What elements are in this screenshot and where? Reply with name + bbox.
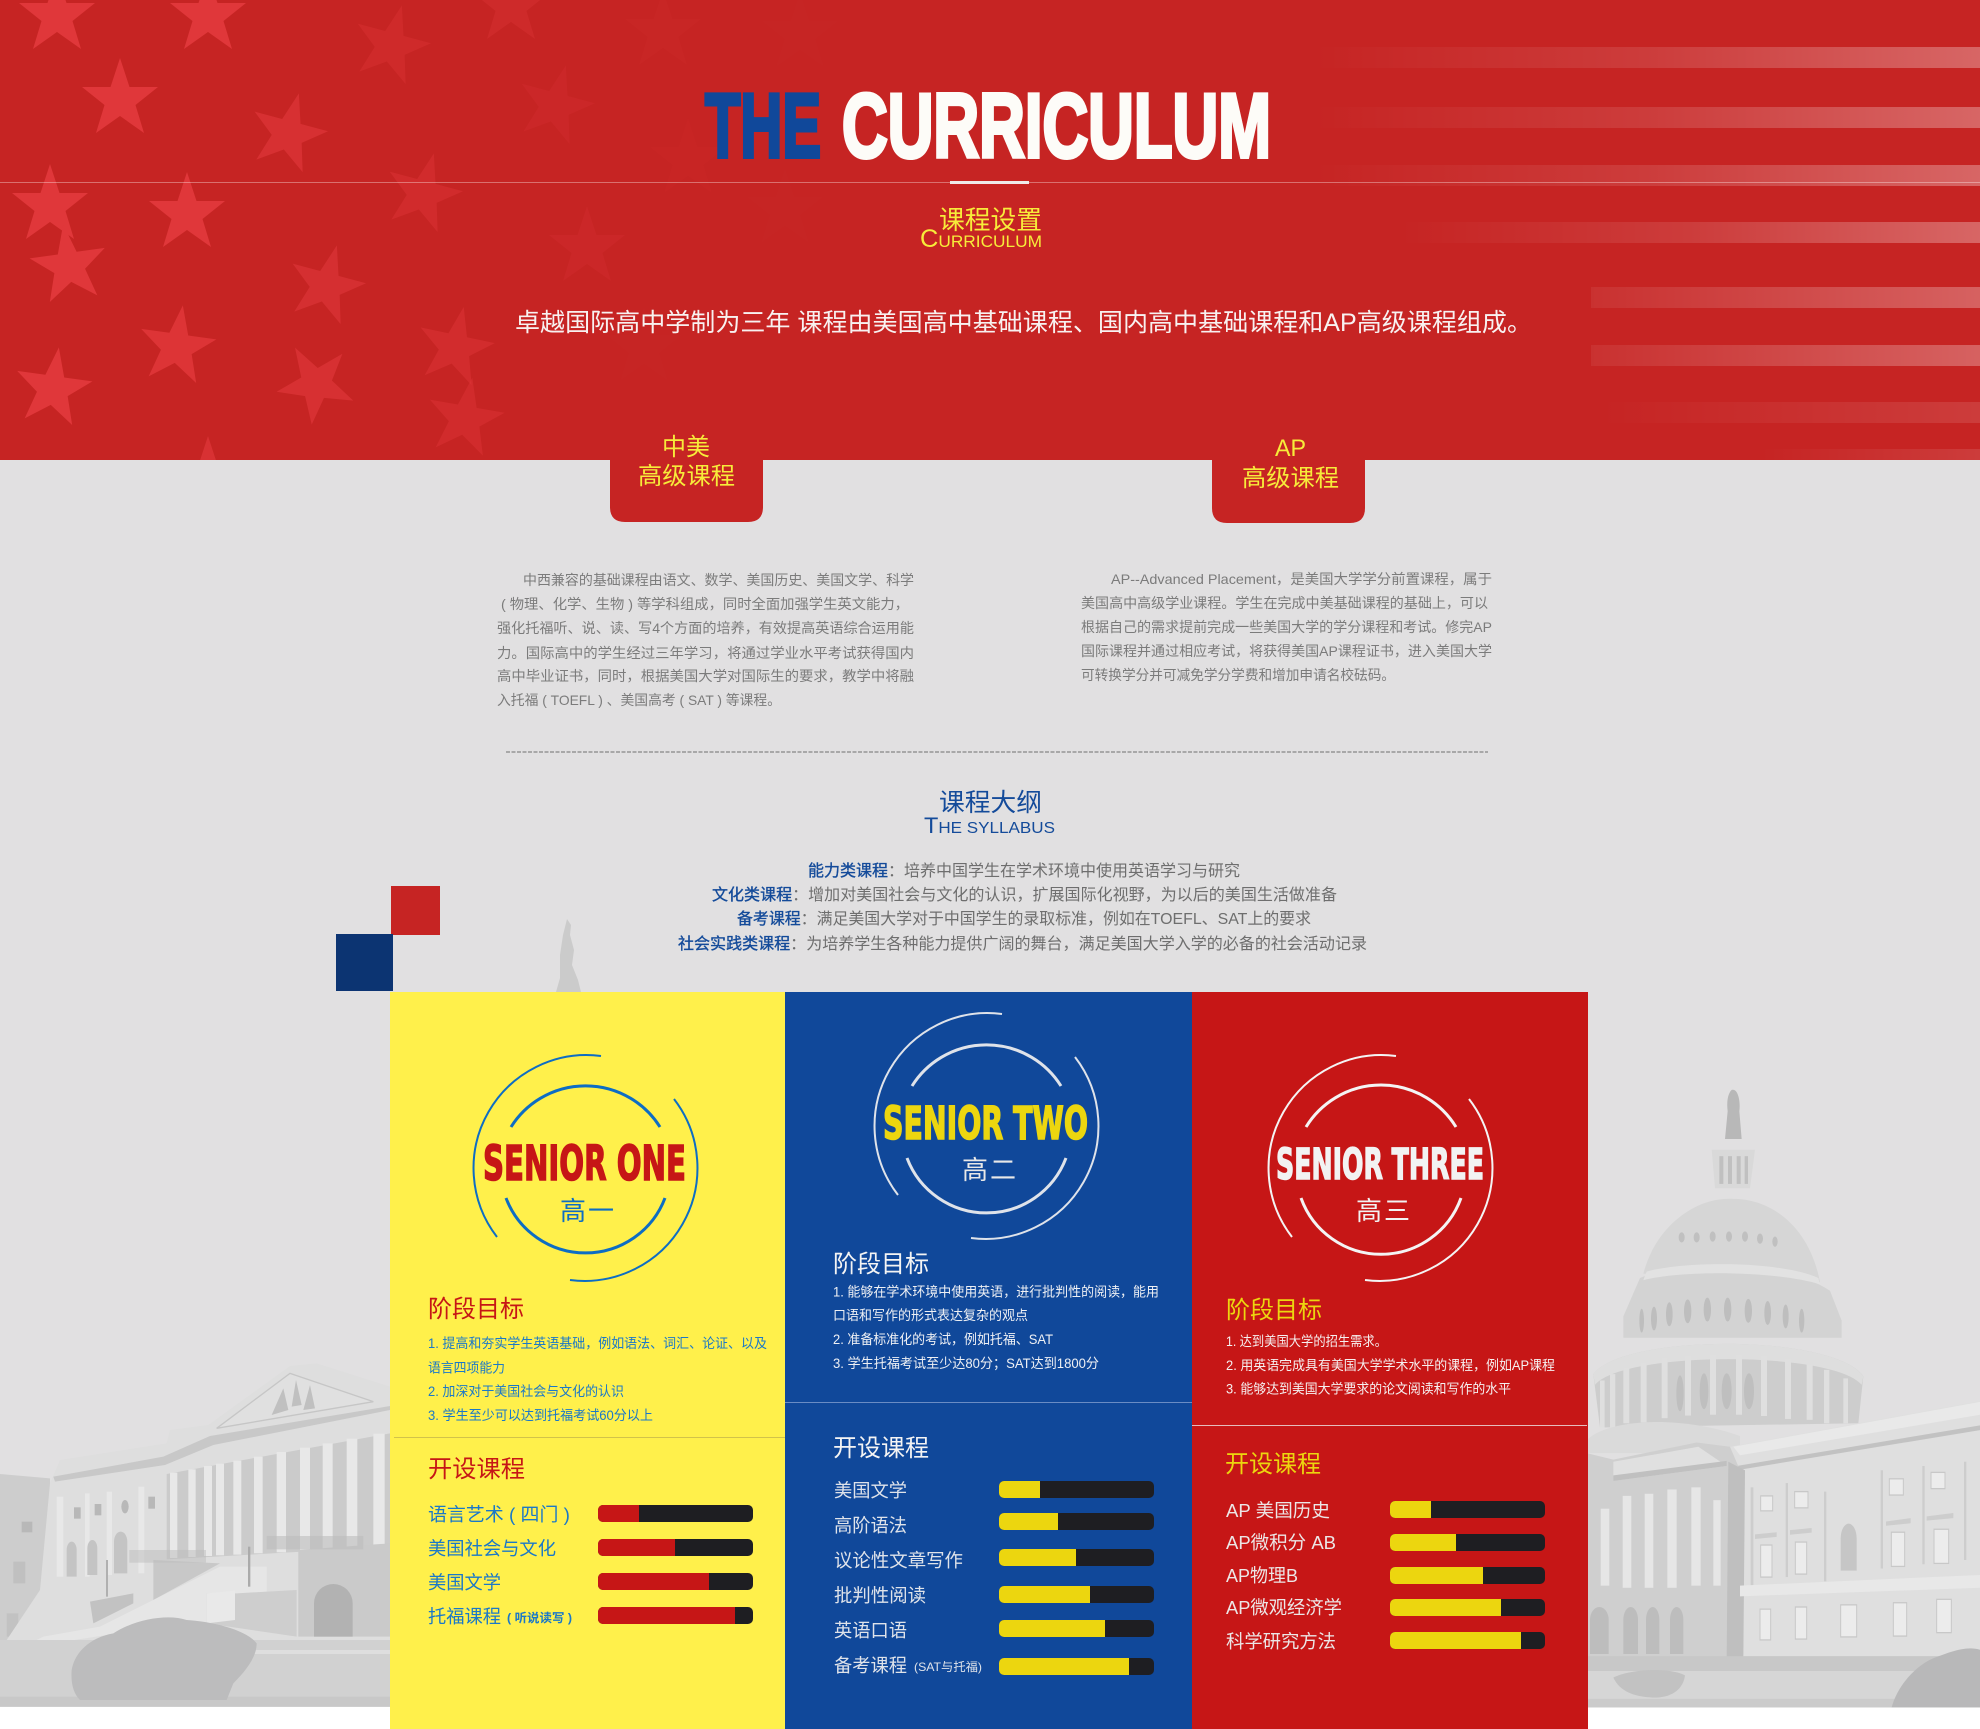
- background stars: [11, 0, 838, 511]
- panel: senior one: [390, 992, 785, 1729]
- text block: AP description: 美国高中高级学业课程。学生在完成中美基础课程的基础上，可以: [1081, 595, 1488, 611]
- text block: AP description: 可转换学分并可减免学分学费和增加申请名校砝码。: [1081, 667, 1395, 683]
- course labels: 语言艺术 ( 四门 ): [428, 1504, 570, 1525]
- badge: senior three: 高三: [1356, 1196, 1410, 1226]
- statue silhouette: [556, 919, 581, 992]
- course labels: AP物理B: [1226, 1565, 1298, 1586]
- text block: sino-american description: [497, 572, 914, 708]
- heading: stage goals: 阶段目标: [428, 1296, 524, 1323]
- course labels: AP 美国历史: [1226, 1500, 1330, 1521]
- tab: sino-american courses: 中美: [662, 434, 710, 461]
- course bars: [598, 1505, 753, 1624]
- title: [705, 76, 1271, 177]
- goals list: 3. 能够达到美国大学要求的论文阅读和写作的水平: [1226, 1382, 1511, 1396]
- badge: senior one: SENIOR ONE: [483, 1136, 686, 1192]
- text block: sino-american description: 入托福 ( TOEFL ) 、美国高考 ( SAT ) 等课程。: [497, 692, 781, 708]
- section heading: syllabus: THE SYLLABUS: [924, 813, 1055, 838]
- goals list: 1. 能够在学术环境中使用英语，进行批判性的阅读，能用: [833, 1284, 1159, 1300]
- panel: senior three: [1192, 992, 1588, 1729]
- course labels: AP微观经济学: [1226, 1597, 1342, 1618]
- badge: senior one: [474, 1055, 697, 1281]
- text block: sino-american description: 高中毕业证书，同时，根据美国大学对国际生的要求，教学中将融: [497, 668, 914, 684]
- course labels: (SAT与托福): [914, 1659, 982, 1674]
- section heading: syllabus: [924, 789, 1055, 838]
- badge: senior two: [875, 1013, 1098, 1239]
- text block: AP description: 根据自己的需求提前完成一些美国大学的学分课程和考试。修完AP: [1081, 619, 1492, 635]
- heading: stage goals: 阶段目标: [833, 1251, 929, 1278]
- course bars: [999, 1481, 1154, 1675]
- tab: sino-american courses: 高级课程: [638, 463, 735, 490]
- panel: senior two: [785, 992, 1192, 1729]
- course labels: [428, 1504, 572, 1627]
- image: capitol west wing: [0, 1363, 390, 1707]
- title: THE: [705, 76, 821, 177]
- text block: AP description: AP--Advanced Placement，是美国大学学分前置课程，属于: [1111, 571, 1492, 587]
- section heading: curriculum: [920, 205, 1042, 253]
- goals list: 1. 提高和夯实学生英语基础，例如语法、词汇、论证、以及: [428, 1335, 767, 1351]
- intro text: 卓越国际高中学制为三年 课程由美国高中基础课程、国内高中基础课程和AP高级课程组成。: [515, 309, 1532, 337]
- text block: sino-american description: 强化托福听、说、读、写4个方面的培养，有效提高英语综合运用能: [497, 620, 914, 636]
- badge: senior two: SENIOR TWO: [883, 1097, 1088, 1150]
- course labels: 美国文学: [834, 1480, 907, 1501]
- tab: AP courses: [1212, 435, 1365, 523]
- text block: sino-american description: 力。国际高中的学生经过三年学习，将通过学业水平考试获得国内: [497, 645, 914, 661]
- course bars: [1390, 1501, 1545, 1649]
- decorative squares: [336, 886, 440, 991]
- text block: AP description: [1081, 571, 1492, 683]
- syllabus categories: 文化类课程：增加对美国社会与文化的认识，扩展国际化视野，为以后的美国生活做准备: [712, 886, 1337, 904]
- text block: AP description: 国际课程并通过相应考试，将获得美国AP课程证书，进入美国大学: [1081, 643, 1492, 659]
- goals list: 3. 学生托福考试至少达80分；SAT达到1800分: [833, 1356, 1099, 1372]
- goals list: 2. 准备标准化的考试，例如托福、SAT: [833, 1331, 1053, 1347]
- course labels: [834, 1480, 982, 1676]
- course labels: 托福课程: [428, 1606, 501, 1627]
- goals list: [833, 1284, 1159, 1372]
- syllabus categories: [678, 861, 1367, 953]
- goals list: 口语和写作的形式表达复杂的观点: [833, 1307, 1028, 1323]
- background stripes: [1313, 47, 1980, 460]
- section heading: syllabus: 课程大纲: [939, 789, 1042, 817]
- course labels: 美国社会与文化: [428, 1538, 556, 1559]
- tab: AP courses: 高级课程: [1242, 465, 1339, 492]
- tab: AP courses: AP: [1275, 435, 1306, 462]
- goals list: [428, 1335, 767, 1423]
- header band: [0, 0, 1980, 511]
- section heading: curriculum: 课程设置: [939, 205, 1042, 235]
- badge: senior one: 高一: [560, 1196, 614, 1226]
- syllabus categories: 备考课程：满足美国大学对于中国学生的录取标准，例如在TOEFL、SAT上的要求: [737, 910, 1311, 928]
- goals list: 1. 达到美国大学的招生需求。: [1226, 1334, 1387, 1349]
- course labels: 美国文学: [428, 1572, 501, 1593]
- goals list: 2. 用英语完成具有美国大学学术水平的课程，例如AP课程: [1226, 1357, 1555, 1373]
- badge: senior three: SENIOR THREE: [1276, 1140, 1484, 1190]
- image: capitol dome: [1580, 1090, 1980, 1707]
- goals list: [1226, 1334, 1555, 1396]
- course labels: 科学研究方法: [1226, 1631, 1336, 1652]
- course labels: [1226, 1500, 1342, 1652]
- course labels: AP微积分 AB: [1226, 1532, 1336, 1553]
- badge: senior two: 高二: [962, 1155, 1016, 1185]
- heading: courses: 开设课程: [1225, 1451, 1321, 1478]
- goals list: 3. 学生至少可以达到托福考试60分以上: [428, 1408, 653, 1423]
- syllabus categories: 社会实践类课程：为培养学生各种能力提供广阔的舞台，满足美国大学入学的必备的社会活动记录: [678, 935, 1367, 953]
- heading: courses: 开设课程: [833, 1435, 929, 1462]
- goals list: 2. 加深对于美国社会与文化的认识: [428, 1384, 624, 1399]
- badge: senior three: [1269, 1055, 1492, 1281]
- goals list: 语言四项能力: [428, 1360, 505, 1376]
- title: CURRICULUM: [842, 76, 1271, 177]
- course labels: 议论性文章写作: [834, 1550, 963, 1571]
- course labels: 备考课程: [834, 1655, 907, 1676]
- course labels: ( 听说读写 ): [507, 1610, 572, 1625]
- text block: sino-american description: ( 物理、化学、生物 ) 等学科组成，同时全面加强学生英文能力，: [501, 596, 909, 612]
- heading: stage goals: 阶段目标: [1226, 1297, 1322, 1324]
- section heading: curriculum: CURRICULUM: [920, 225, 1042, 253]
- heading: courses: 开设课程: [428, 1456, 525, 1483]
- tab: sino-american courses: [610, 434, 763, 522]
- text block: sino-american description: 中西兼容的基础课程由语文、数学、美国历史、美国文学、科学: [523, 572, 914, 588]
- syllabus categories: 能力类课程：培养中国学生在学术环境中使用英语学习与研究: [808, 861, 1240, 880]
- course labels: 批判性阅读: [834, 1585, 926, 1606]
- course labels: 英语口语: [834, 1620, 907, 1641]
- course labels: 高阶语法: [834, 1515, 907, 1536]
